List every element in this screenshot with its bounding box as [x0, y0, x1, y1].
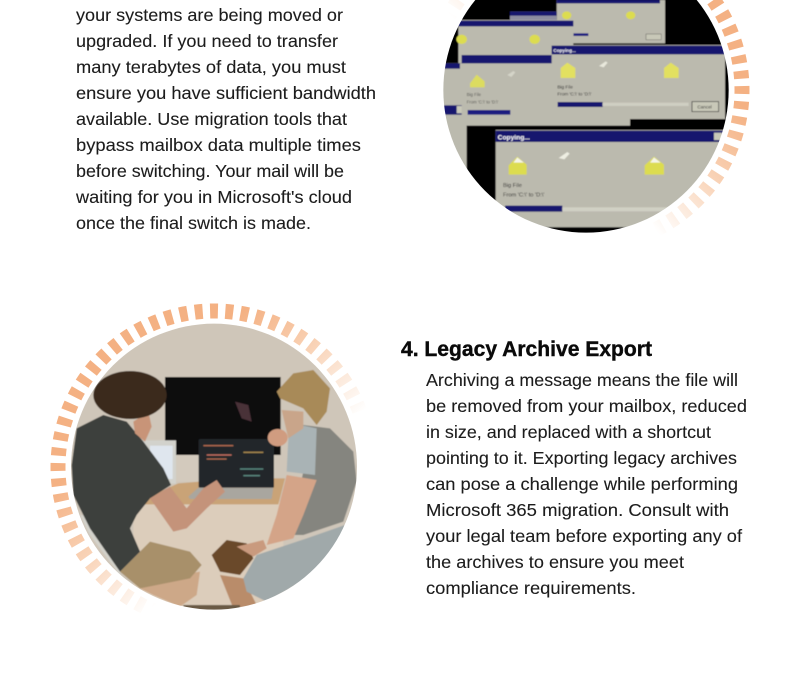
text block: legacy archive paragraph: [426, 370, 747, 598]
text block: migration bandwidth paragraph: many terabytes of data, you must: [76, 57, 346, 77]
text block: legacy archive paragraph: Archiving a message means the file will: [426, 370, 738, 390]
text block: migration bandwidth paragraph: [75, 5, 376, 233]
text block: legacy archive paragraph: compliance requirements.: [426, 578, 636, 598]
photo: file copying dialogs: From 'C:\' to 'D:\': [557, 91, 592, 96]
photo: file copying dialogs: From 'C:\' to 'D:\': [467, 99, 499, 104]
photo: file copying dialogs: Big File: [503, 183, 522, 189]
text block: legacy archive paragraph: your legal team before exporting any of: [426, 526, 742, 546]
text block: migration bandwidth paragraph: before switching. Your mail will be: [76, 161, 344, 181]
text block: migration bandwidth paragraph: your systems are being moved or: [76, 5, 343, 25]
text block: migration bandwidth paragraph: available. Use migration tools that: [76, 109, 347, 129]
heading: Legacy Archive Export: 4. Legacy Archive Export: [401, 338, 652, 361]
dashed ring: top photo: [430, 0, 742, 246]
text block: legacy archive paragraph: be removed from your mailbox, reduced: [426, 396, 747, 416]
text block: legacy archive paragraph: can pose a challenge while performing: [426, 474, 738, 494]
text block: legacy archive paragraph: in size, and replaced with a shortcut: [426, 422, 711, 442]
photo: file copying dialogs: Big File: [557, 84, 573, 89]
photo: file copying dialogs: Cancel: [697, 105, 712, 110]
text block: migration bandwidth paragraph: waiting for you in Microsoft's cloud: [75, 187, 352, 207]
text block: migration bandwidth paragraph: once the final switch is made.: [76, 213, 311, 233]
photo: file copying dialogs: [440, 0, 733, 241]
text block: migration bandwidth paragraph: upgraded. If you need to transfer: [76, 31, 338, 51]
photo: file copying dialogs: Copying...: [553, 48, 576, 53]
photo: file copying dialogs: Copying...: [498, 134, 530, 141]
photo: two developers at a desk: [67, 322, 363, 615]
text block: migration bandwidth paragraph: bypass mailbox data multiple times: [76, 135, 361, 155]
text block: migration bandwidth paragraph: ensure you have sufficient bandwidth: [76, 83, 376, 103]
dashed ring: bottom photo: [58, 311, 370, 623]
text block: legacy archive paragraph: pointing to it. Exporting legacy archives: [426, 448, 737, 468]
text block: legacy archive paragraph: Microsoft 365 migration. Consult with: [426, 500, 729, 520]
photo: file copying dialogs: Big File: [467, 92, 482, 97]
text block: legacy archive paragraph: the archives to ensure you meet: [426, 552, 684, 572]
photo: file copying dialogs: From 'C:\' to 'D:\': [503, 193, 544, 199]
